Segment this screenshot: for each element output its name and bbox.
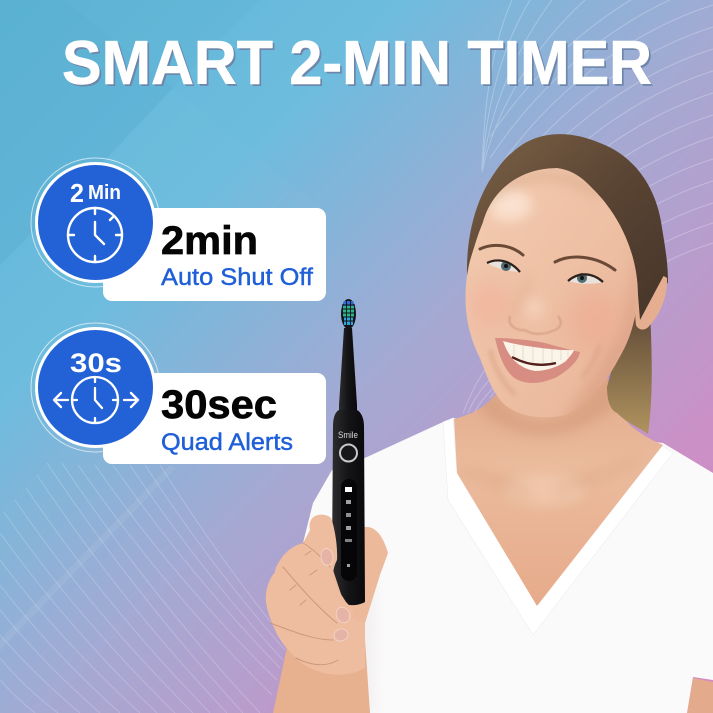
forearm bbox=[273, 640, 370, 713]
ponytail bbox=[607, 312, 652, 434]
bristles bbox=[342, 300, 355, 326]
face bbox=[466, 137, 664, 425]
shirt bbox=[303, 418, 713, 713]
brush body bbox=[332, 410, 365, 605]
icon: clock with arrows bbox=[54, 377, 138, 423]
feature: 2 minute auto shut off bbox=[31, 158, 326, 301]
feature: 30 second quad alerts bbox=[31, 323, 326, 464]
hand back with thumb bbox=[320, 525, 388, 670]
mode panel bbox=[341, 479, 357, 581]
card: 2min bbox=[103, 208, 326, 301]
arm, right side bbox=[687, 678, 713, 713]
badge: 30s clock bbox=[31, 323, 160, 452]
subheading: quad alerts: Quad Alerts bbox=[161, 429, 293, 456]
neck and chest bbox=[454, 370, 663, 606]
background facets bbox=[0, 0, 330, 650]
hair front bbox=[467, 137, 664, 320]
eyes bbox=[487, 260, 603, 284]
badge: 2 min clock bbox=[31, 158, 160, 287]
brand label: Smile bbox=[338, 430, 358, 440]
title: SMART 2-MIN TIMER bbox=[62, 29, 652, 98]
background diagonal lines, bottom left bbox=[0, 463, 285, 713]
smile bbox=[495, 338, 580, 383]
brush head bbox=[341, 299, 356, 329]
icon: clock bbox=[68, 208, 122, 262]
card: 30sec bbox=[103, 373, 326, 464]
eyebrows bbox=[480, 245, 615, 270]
finger creases bbox=[270, 543, 338, 665]
toothbrush bbox=[332, 299, 365, 605]
hand front with gripping fingers bbox=[266, 515, 365, 675]
shirt collar bbox=[443, 418, 673, 635]
woman smiling bbox=[266, 134, 713, 713]
heading: 30sec: 30sec bbox=[161, 383, 277, 427]
badge label: 2 Min bbox=[70, 178, 121, 208]
nose bbox=[509, 275, 561, 334]
badge label: 2 Min: 2 bbox=[70, 178, 84, 208]
badge label: 30s: 30s bbox=[70, 348, 122, 378]
heading: 2min: 2min bbox=[161, 219, 258, 263]
hair back bbox=[467, 134, 668, 330]
ear bbox=[635, 276, 667, 330]
subheading: auto shut off: Auto Shut Off bbox=[161, 264, 313, 291]
badge label: 2 Min: Min bbox=[88, 182, 121, 204]
brush neck bbox=[339, 328, 357, 412]
fingernails bbox=[320, 548, 352, 643]
background curved lines, top right bbox=[463, 0, 713, 418]
title: SMART 2-MIN TIMER bbox=[64, 31, 654, 100]
power button bbox=[340, 444, 357, 462]
